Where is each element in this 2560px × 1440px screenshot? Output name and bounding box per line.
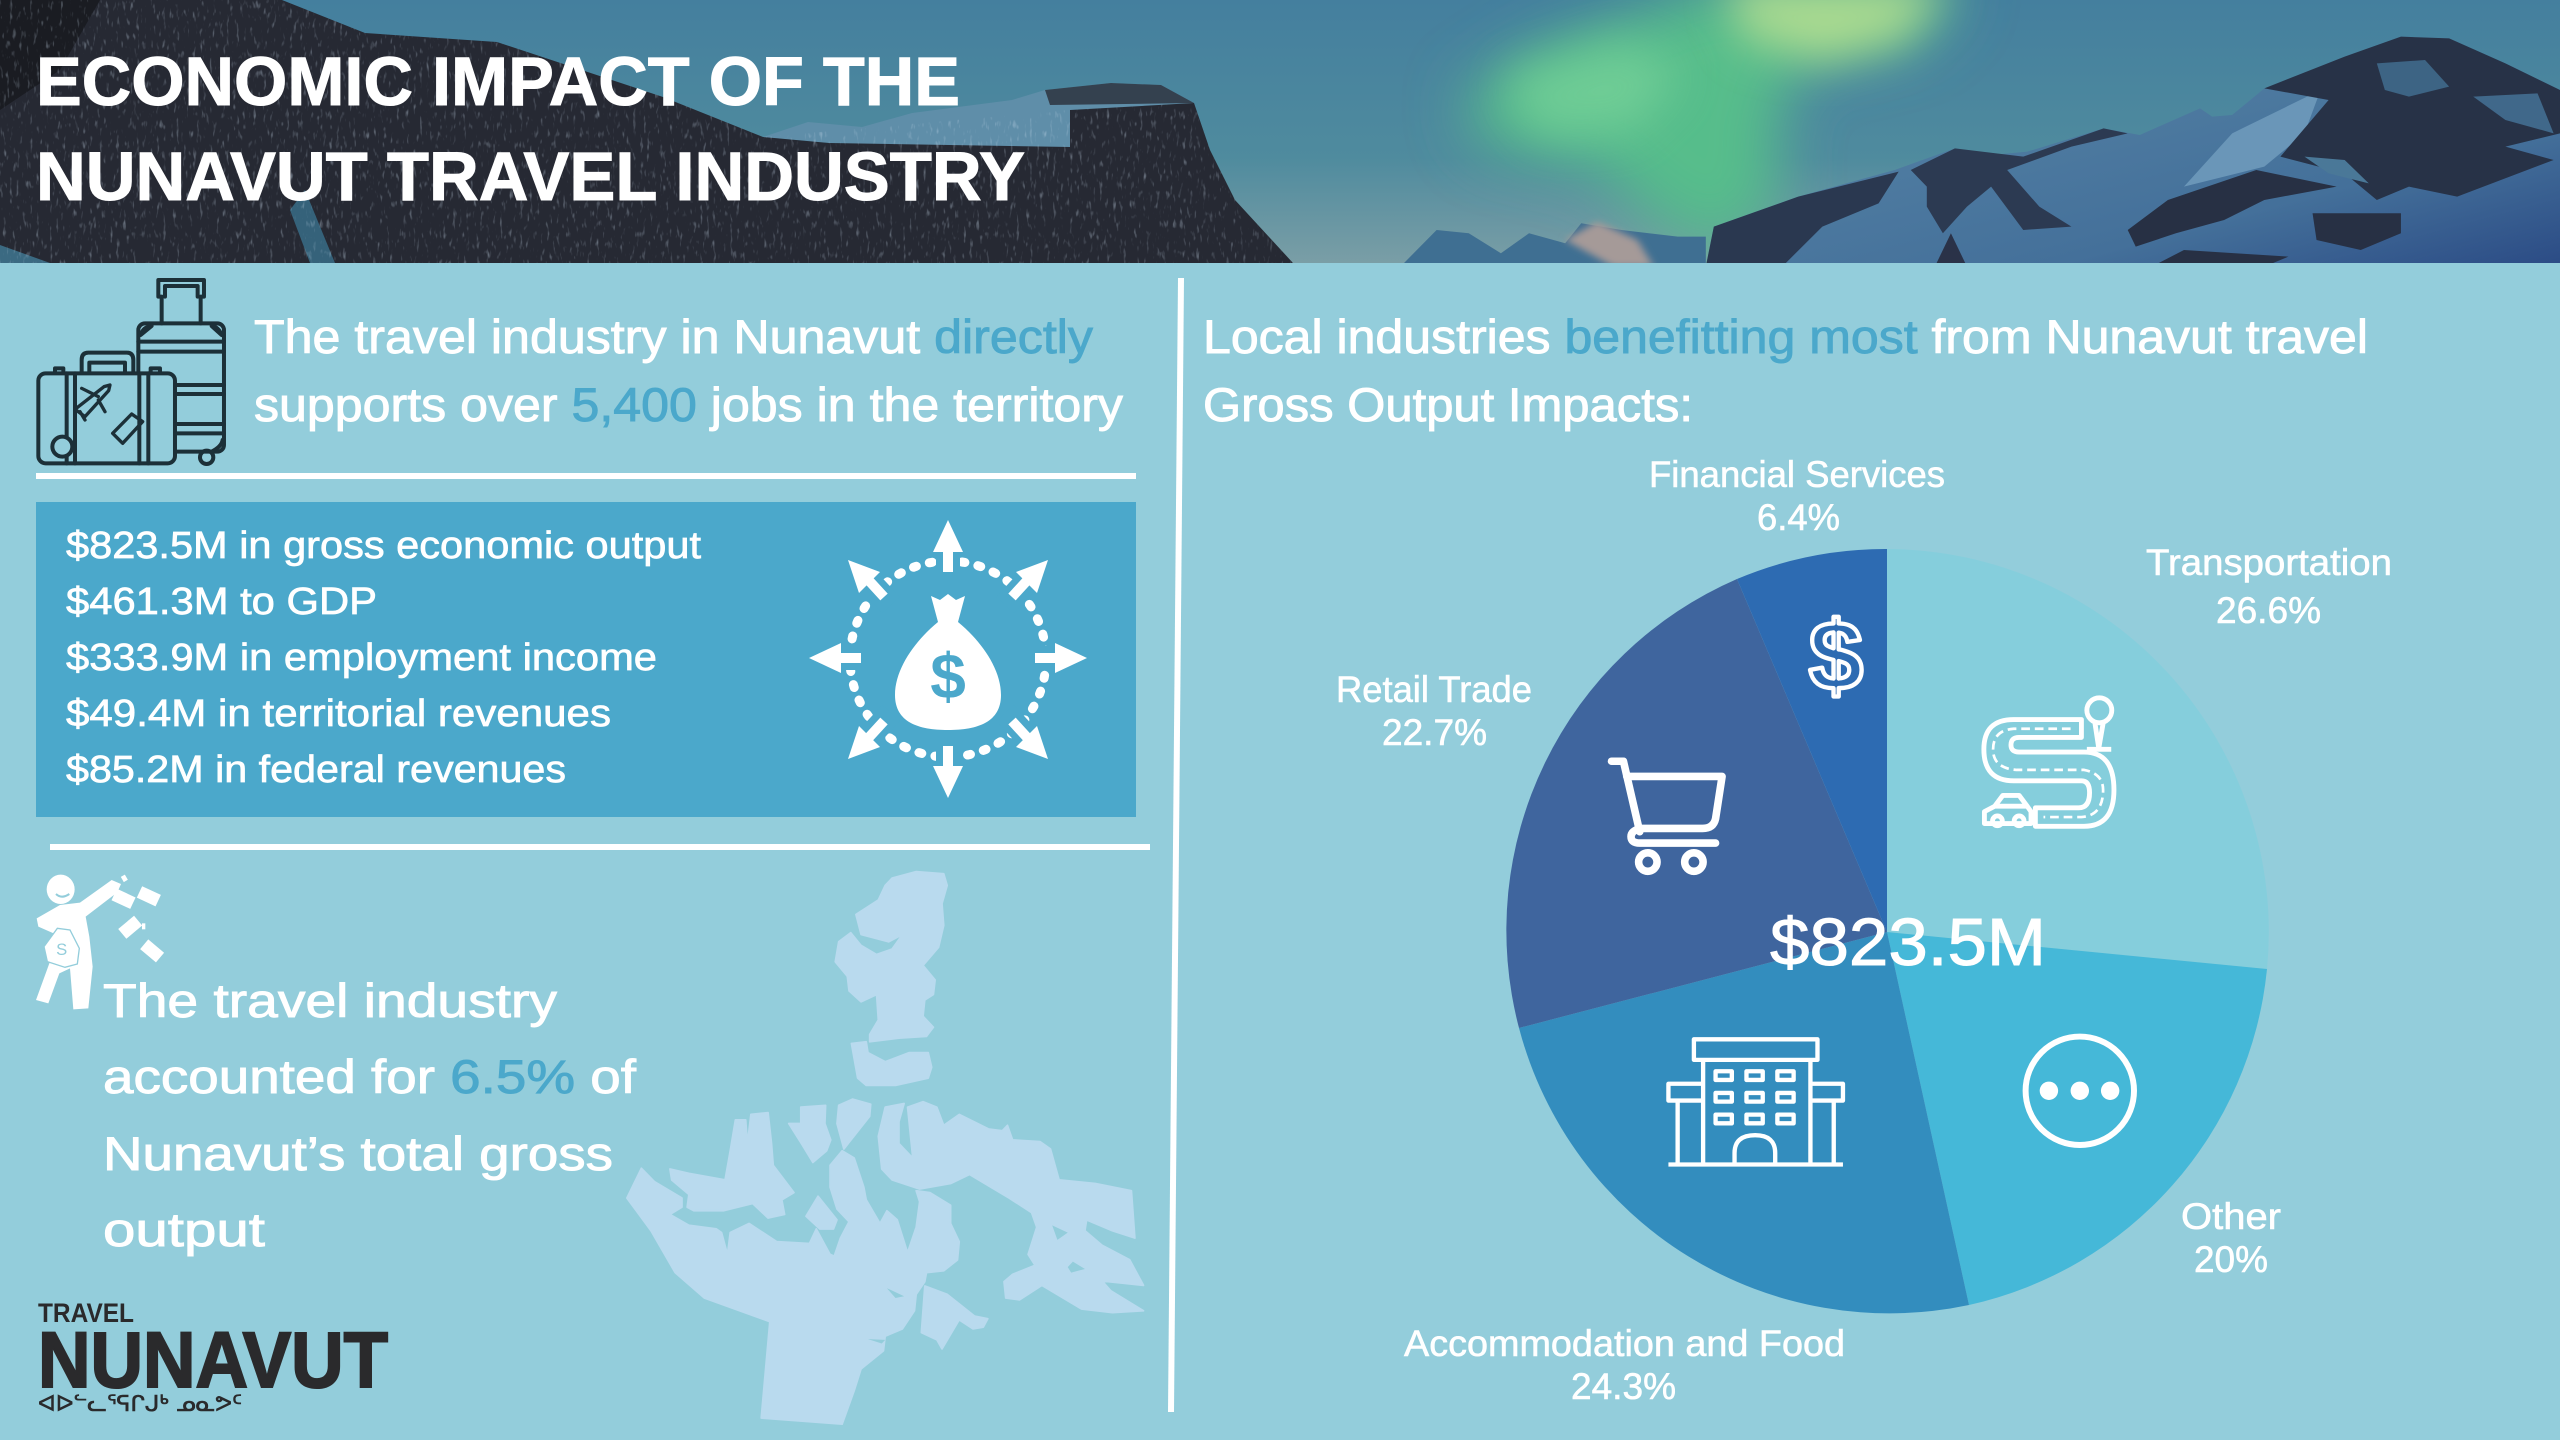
label: financial services: Financial Services [1649, 454, 1945, 495]
label: other: 20% [2194, 1239, 2268, 1280]
label: transportation [2146, 542, 2392, 631]
pie chart: gross output impacts [1506, 549, 2269, 1313]
aurora [1461, 0, 1967, 253]
label: accommodation and food [1404, 1323, 1845, 1407]
label: retail trade: 22.7% [1382, 712, 1487, 753]
icon: hotel [1668, 1039, 1843, 1164]
label: other [2181, 1196, 2281, 1280]
text: direct jobs statement: supports over 5,400 jobs in the territory [254, 378, 1124, 431]
map of Nunavut [627, 872, 1143, 1424]
list of figures: $49.4M in territorial revenues [66, 693, 611, 735]
text: share of gross output: output [103, 1203, 265, 1256]
logo: Travel Nunavut: ᐊᐅᓪᓚᕐᕋᒋᒍᒃ ᓄᓇᕗᑦ [38, 1392, 242, 1417]
label: accommodation and food: Accommodation and Food [1404, 1323, 1845, 1364]
label: retail trade [1336, 669, 1532, 753]
label: other: Other [2181, 1196, 2281, 1237]
center total: $823.5M [1770, 905, 2046, 980]
slice: accommodation and food [1519, 932, 1969, 1313]
left mountain texture [0, 0, 1293, 263]
text: direct jobs statement: The travel industry in Nunavut directly [254, 310, 1094, 363]
list of figures: $461.3M to GDP [66, 581, 377, 623]
slice: retail trade [1506, 579, 1887, 1028]
icon: money bag with arrows: $ [930, 640, 966, 712]
right mountains [1400, 37, 2560, 267]
logo: Travel Nunavut: NUNAVUT [38, 1315, 388, 1404]
list of figures: $333.9M in employment income [66, 637, 657, 679]
icon: shopping cart [1612, 761, 1722, 871]
icon: figure throwing money: S [56, 940, 67, 959]
icon: more dots [2026, 1037, 2134, 1145]
label: retail trade: Retail Trade [1336, 669, 1532, 710]
text: share of gross output [103, 974, 637, 1256]
list of figures: $85.2M in federal revenues [66, 749, 566, 791]
heading: local industries: Local industries benefitting most from Nunavut travel [1203, 310, 2368, 363]
text: share of gross output: The travel industry [103, 974, 558, 1027]
title: NUNAVUT TRAVEL INDUSTRY [36, 138, 1025, 215]
list of figures: $823.5M in gross economic output [66, 525, 701, 567]
slice: other [1887, 932, 2267, 1305]
header photo: mountains and aurora [0, 0, 2560, 267]
icon: suitcases [38, 280, 224, 464]
heading: local industries: Gross Output Impacts: [1203, 378, 1693, 431]
label: accommodation and food: 24.3% [1571, 1366, 1676, 1407]
icon: money bag with arrows [809, 520, 1087, 798]
icon: road with pin and car [1984, 698, 2114, 826]
text: share of gross output: accounted for 6.5% of [103, 1050, 637, 1103]
slice: transportation [1887, 549, 2269, 969]
panel: economic figures [36, 502, 1136, 817]
text: share of gross output: Nunavut’s total gross [103, 1127, 613, 1180]
slice: financial services [1737, 549, 1887, 932]
icon: figure throwing money [36, 875, 164, 1009]
label: financial services: 6.4% [1757, 497, 1840, 538]
label: transportation: 26.6% [2216, 590, 2321, 631]
title [36, 43, 1025, 215]
label: financial services [1649, 454, 1945, 538]
list of figures [66, 525, 701, 791]
title: ECONOMIC IMPACT OF THE [36, 43, 960, 120]
logo: Travel Nunavut: TRAVEL [38, 1298, 134, 1328]
left mountains [764, 90, 1190, 147]
heading: local industries [1203, 310, 2368, 431]
text: direct jobs statement [254, 310, 1124, 431]
label: transportation: Transportation [2146, 542, 2392, 583]
vertical divider [1171, 278, 1181, 1412]
icon: dollar: $ [1809, 602, 1863, 711]
